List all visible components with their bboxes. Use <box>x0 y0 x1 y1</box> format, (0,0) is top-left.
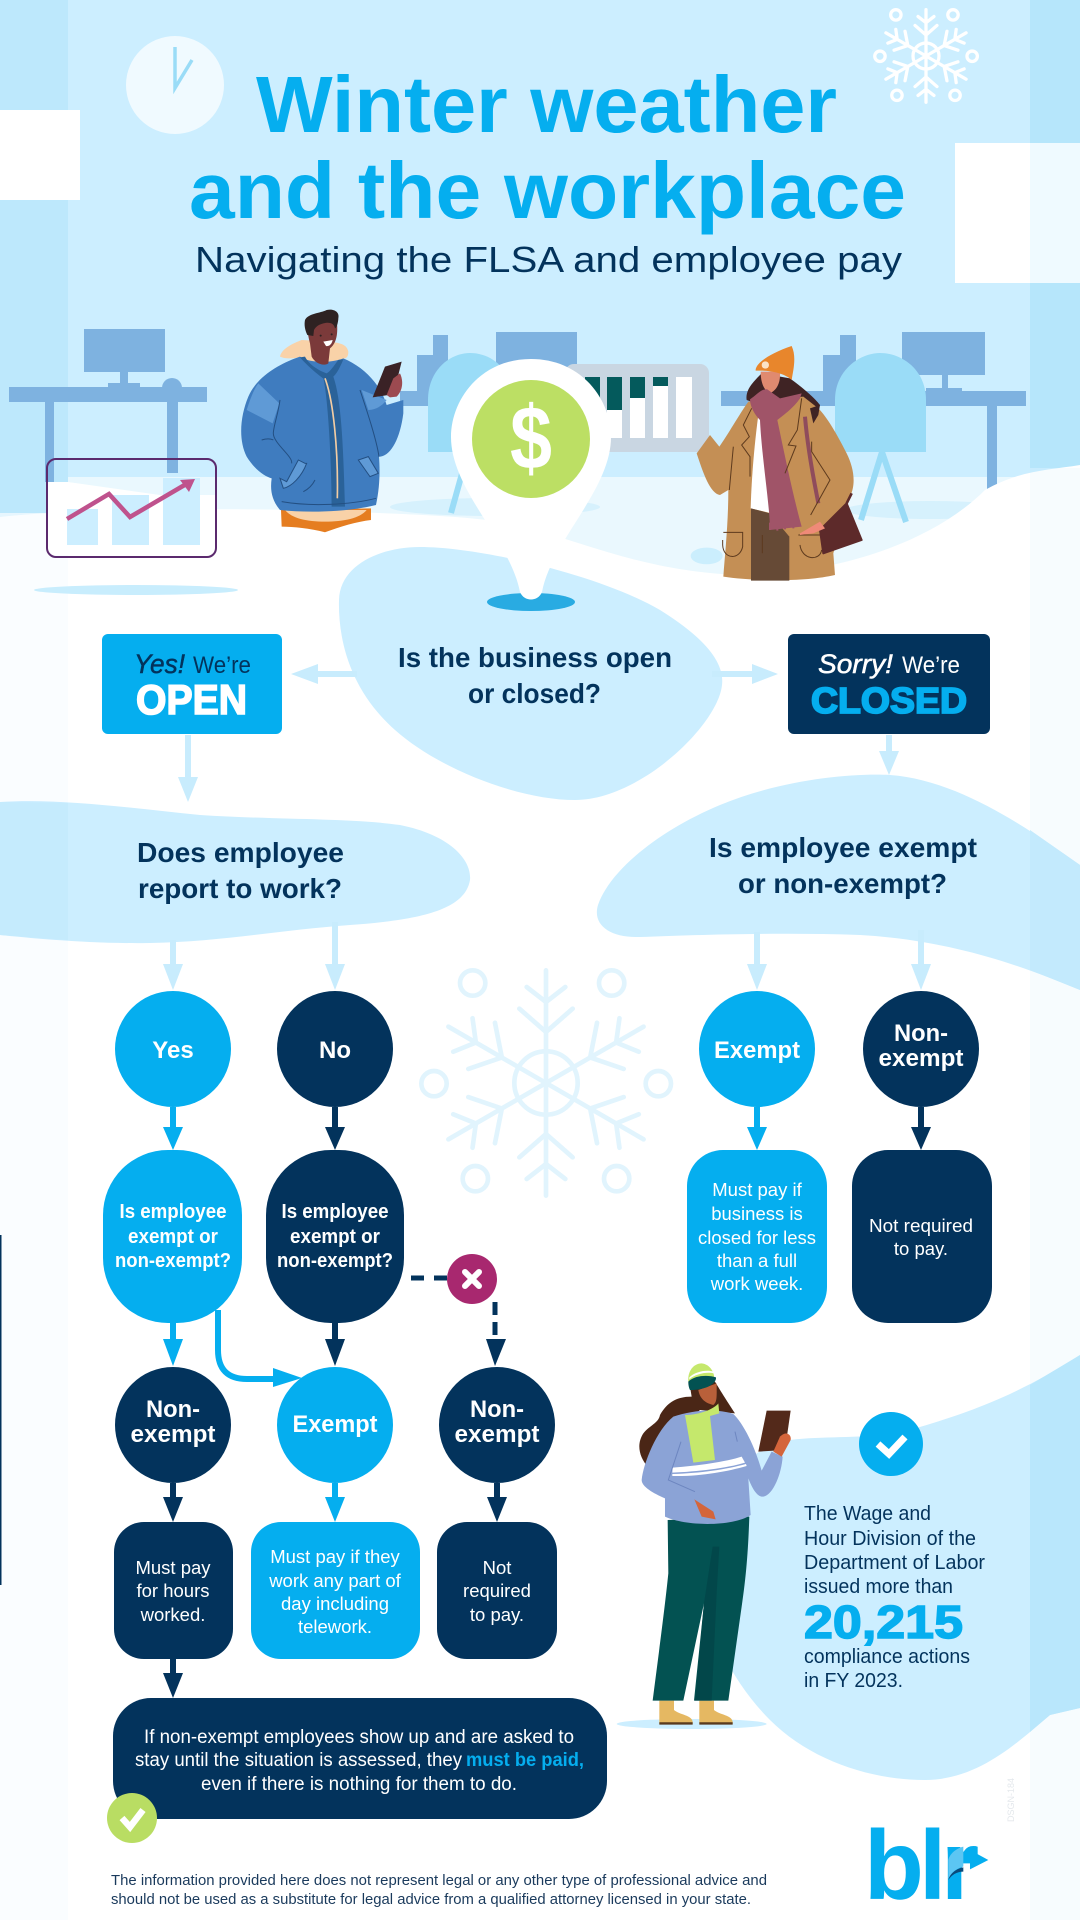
card: exempt closed pay: work week. <box>710 1273 803 1294</box>
circle: non-exempt upper right: Non- <box>894 1020 948 1047</box>
circle: non-exempt right <box>439 1367 555 1483</box>
sign: open <box>102 634 282 734</box>
title <box>189 60 906 235</box>
right chair <box>835 353 926 522</box>
dashed connector with x badge <box>411 1254 506 1366</box>
sign: closed: CLOSED <box>811 680 967 721</box>
background office furniture <box>9 329 1026 522</box>
card: exempt closed pay: business is <box>711 1203 803 1224</box>
title: Winter weather <box>256 60 837 149</box>
card: not required to pay: required <box>463 1580 531 1601</box>
icon: pale snowflake <box>421 970 671 1196</box>
card: must pay if they work <box>251 1522 420 1659</box>
blob: compliance stat <box>700 1355 1080 1780</box>
disclaimer: The information provided here does not represent legal or any other type of professional advice and <box>111 1873 767 1889</box>
card: not required to pay: Not <box>483 1557 511 1578</box>
stat text: in FY 2023. <box>804 1669 903 1692</box>
icon: green check <box>107 1793 157 1843</box>
circle: non-exempt upper right <box>863 991 979 1107</box>
pill: yes path question: non-exempt? <box>115 1250 231 1272</box>
card: must pay if they work: telework. <box>298 1616 372 1637</box>
card: exempt closed pay: than a full <box>717 1250 797 1271</box>
circle: exempt middle: Exempt <box>292 1411 378 1438</box>
arrow to open <box>291 664 357 684</box>
circle: non-exempt left <box>115 1367 231 1483</box>
card: must pay if they work: day including <box>281 1593 389 1614</box>
arrows: circles to pills <box>163 1107 931 1150</box>
circle: no <box>277 991 393 1107</box>
pill: yes path question: exempt or <box>128 1226 218 1248</box>
circle: exempt upper right <box>699 991 815 1107</box>
note box: even if there is nothing for them to do. <box>201 1774 517 1795</box>
disclaimer: should not be used as a substitute for legal advice from a qualified attorney licensed in your state. <box>111 1892 751 1908</box>
man in blue winter jacket <box>241 310 403 532</box>
office floor <box>0 477 1080 587</box>
question: exempt or non-exempt <box>709 832 977 899</box>
sign: open: OPEN <box>136 676 247 723</box>
card: non-exempt closed pay <box>852 1150 992 1323</box>
wall chart panel <box>565 364 709 452</box>
card: must pay for hours worked <box>114 1522 233 1659</box>
arrows: circles to result cards <box>163 1483 507 1522</box>
question: exempt or non-exempt: or non-exempt? <box>738 868 947 899</box>
card: not required to pay <box>437 1522 557 1659</box>
location pin with dollar sign <box>451 359 611 611</box>
question: open or closed: or closed? <box>468 678 601 709</box>
blob: business open or closed <box>339 547 722 800</box>
sign: closed <box>788 634 990 734</box>
pill: yes path question: Is employee <box>120 1201 226 1223</box>
arrow to closed <box>712 664 778 684</box>
arrows: pills to lower circles <box>163 1310 345 1387</box>
card: exempt closed pay: Must pay if <box>712 1179 803 1200</box>
card: non-exempt closed pay: to pay. <box>894 1238 948 1259</box>
floor shadows <box>390 498 1015 519</box>
circle: yes <box>115 991 231 1107</box>
arrow: to note <box>163 1659 183 1698</box>
watermark: DSGN-184 <box>1006 1778 1016 1822</box>
card: must pay for hours worked: Must pay <box>135 1557 211 1578</box>
arrow: open down <box>178 735 198 802</box>
note box: If non-exempt employees show up and are asked to <box>144 1727 574 1748</box>
sign: open: We’re <box>193 652 251 679</box>
card: must pay for hours worked: for hours <box>136 1580 210 1601</box>
icon: blue check <box>859 1412 923 1476</box>
blob: report to work <box>0 801 470 943</box>
stat text: Hour Division of the <box>804 1527 976 1550</box>
circle: non-exempt right: Non- <box>470 1396 524 1423</box>
stat text: compliance actions <box>804 1645 970 1668</box>
circle: non-exempt right: exempt <box>454 1421 540 1448</box>
subtitle: Navigating the FLSA and employee pay <box>195 239 902 280</box>
top side bands <box>0 0 1080 513</box>
snowbank <box>0 465 1080 1920</box>
blob: exempt question <box>597 775 1080 990</box>
middle desk with monitor <box>400 332 577 406</box>
card: must pay if they work: work any part of <box>268 1570 402 1591</box>
left desk <box>9 329 207 482</box>
stat text: The Wage and <box>804 1502 931 1525</box>
pill: no path question: Is employee <box>282 1201 388 1223</box>
question: report to work: report to work? <box>138 873 342 904</box>
pill: no path question: exempt or <box>290 1226 380 1248</box>
question: open or closed <box>398 642 672 709</box>
card: must pay for hours worked: worked. <box>140 1604 205 1625</box>
stat text: issued more than <box>804 1575 953 1598</box>
circle: exempt middle <box>277 1367 393 1483</box>
pill: yes path question <box>103 1150 242 1323</box>
question: report to work <box>137 837 344 904</box>
green coin <box>472 380 590 498</box>
disclaimer <box>111 1873 767 1908</box>
circle: non-exempt left: Non- <box>146 1396 200 1423</box>
question: report to work: Does employee <box>137 837 344 868</box>
stat text: 20,215 <box>804 1596 963 1648</box>
right desk with monitor <box>721 332 1026 506</box>
left shadow ellipse <box>34 585 238 595</box>
question: open or closed: Is the business open <box>398 642 672 673</box>
question: exempt or non-exempt: Is employee exempt <box>709 832 977 863</box>
card: exempt closed pay <box>687 1150 827 1323</box>
note box: must be paid, <box>466 1750 584 1771</box>
light arrows to circles <box>163 922 931 990</box>
stat text <box>804 1502 985 1692</box>
card: exempt closed pay: closed for less <box>698 1227 816 1248</box>
background: winter sky <box>0 0 1080 530</box>
circle: no: No <box>319 1037 351 1064</box>
note box: stay until the situation is assessed, they <box>135 1750 462 1771</box>
dollar symbol: $ <box>510 389 552 489</box>
card: non-exempt closed pay: Not required <box>869 1215 973 1236</box>
pill: no path question <box>266 1150 404 1323</box>
card: must pay if they work: Must pay if they <box>270 1546 401 1567</box>
pin body <box>451 359 611 600</box>
woman in tan coat <box>691 346 862 581</box>
circle: non-exempt upper right: exempt <box>878 1045 964 1072</box>
icon: white snowflake <box>875 10 977 102</box>
note box <box>113 1698 607 1819</box>
icon: clock <box>126 36 224 134</box>
circle: yes: Yes <box>152 1037 194 1064</box>
title: and the workplace <box>189 146 906 235</box>
middle chair <box>428 353 513 513</box>
sign: closed: We’re <box>902 652 960 679</box>
card: not required to pay: to pay. <box>470 1604 524 1625</box>
pill: no path question: non-exempt? <box>277 1250 393 1272</box>
circle: non-exempt left: exempt <box>130 1421 216 1448</box>
circle: exempt upper right: Exempt <box>714 1037 800 1064</box>
woman with tablet <box>617 1363 791 1729</box>
arrow: closed down <box>879 735 899 775</box>
pin shadow <box>487 593 575 611</box>
sign: open: Yes! <box>134 649 185 679</box>
sign: closed: Sorry! <box>818 649 894 679</box>
chart card with rising arrow <box>47 459 216 557</box>
logo: blr: blr <box>864 1810 979 1920</box>
stat text: Department of Labor <box>804 1551 985 1574</box>
